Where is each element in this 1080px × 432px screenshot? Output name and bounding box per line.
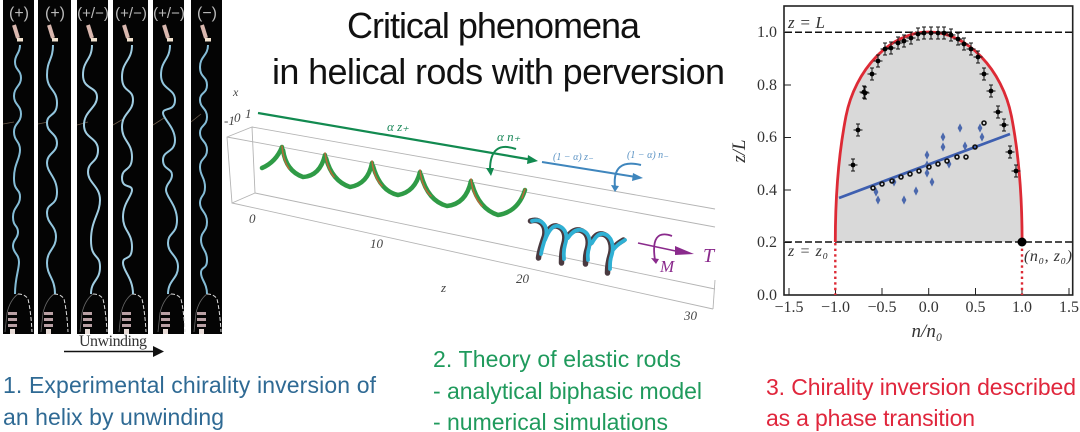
x tick labels: 0.5 — [966, 299, 986, 316]
caption 2: theory: - analytical biphasic model — [433, 378, 702, 404]
x tick labels: 1.0 — [1012, 299, 1032, 316]
axis labels: 10 — [370, 236, 384, 251]
axis labels — [224, 85, 698, 323]
x tick labels: 1.5 — [1059, 299, 1079, 316]
black data with error bars — [848, 27, 1020, 177]
axes frame — [784, 6, 1073, 295]
label: unwinding arrow: Unwinding — [79, 333, 147, 350]
critical point marker — [1018, 238, 1026, 246]
strip 4: (+/−) — [115, 5, 147, 22]
purple arrows: M, T — [638, 234, 716, 276]
green rod helix — [262, 146, 525, 215]
axis labels: 20 — [516, 271, 530, 286]
x tick labels — [774, 299, 1079, 316]
annotation z=L: z = L — [787, 13, 825, 32]
blue fit line — [839, 134, 1010, 198]
purple arrows: M, T: T — [703, 245, 716, 267]
y tick labels — [757, 24, 777, 304]
axis labels: z — [440, 280, 446, 295]
strip 6: (−) — [197, 5, 217, 22]
caption 1: experiment: an helix by unwinding — [3, 404, 224, 430]
y axis title: z/L — [729, 139, 750, 164]
strip 2 — [38, 0, 71, 334]
caption 1: experiment: 1. Experimental chirality inversion of — [3, 372, 377, 398]
ticks — [784, 32, 1069, 295]
y tick labels: 0.8 — [757, 77, 777, 94]
x axis title: n/n₀ — [912, 321, 942, 342]
caption 1: experiment — [3, 372, 377, 430]
strip 1: (+) — [9, 5, 29, 22]
axis labels: 0 — [234, 110, 241, 125]
x tick labels: −0.5 — [867, 299, 897, 316]
caption 3: phase transition: as a phase transition — [766, 405, 975, 431]
cyan rod helix — [530, 220, 625, 273]
y tick labels: 0.2 — [757, 234, 777, 251]
strip 6 — [191, 0, 222, 334]
axis labels: 1 — [245, 106, 252, 121]
strip 5 — [153, 0, 185, 334]
label: unwinding arrow — [64, 333, 164, 357]
strip 3: (+/−) — [77, 5, 109, 22]
x tick labels: −1.0 — [821, 299, 850, 316]
blue arrows: (1-alpha) z-, (1-alpha) n-: (1 − α) z₋ — [553, 152, 594, 163]
caption 2: theory: 2. Theory of elastic rods — [433, 346, 681, 372]
green arrows: alpha z+, alpha n+: α n₊ — [497, 129, 521, 144]
strip 1 — [3, 0, 34, 334]
panel: 3D rod simulation box — [224, 85, 716, 323]
strip 2: (+) — [45, 5, 65, 22]
open circle data — [871, 121, 986, 190]
red dotted continuation — [835, 243, 1022, 295]
axis labels: 0 — [249, 211, 256, 226]
panel: phase diagram chart — [729, 6, 1079, 342]
red phase boundary — [835, 32, 1022, 242]
x tick labels: 0.0 — [919, 299, 939, 316]
blue diamonds — [874, 123, 984, 205]
axis labels: x — [232, 85, 239, 99]
blue arrows: (1-alpha) z-, (1-alpha) n-: (1 − α) n₋ — [627, 150, 669, 161]
box wireframe — [227, 127, 715, 309]
strip 4 — [113, 0, 148, 334]
title — [272, 5, 725, 92]
purple arrows: M, T: M — [659, 257, 675, 276]
annotation z=z0: z = z₀ — [787, 243, 828, 260]
green arrows: alpha z+, alpha n+ — [258, 113, 538, 176]
axis labels: -1 — [224, 113, 235, 128]
y tick labels: 0.4 — [757, 182, 777, 199]
axis labels: 30 — [683, 308, 698, 323]
y tick labels: 0.0 — [757, 287, 777, 304]
panel: experimental photo strips — [3, 0, 222, 334]
x tick labels: −1.5 — [774, 299, 804, 316]
y tick labels: 1.0 — [757, 24, 777, 41]
title: in helical rods with perversion — [272, 51, 725, 92]
dashed lines z=L, z=z0 — [785, 32, 1072, 242]
caption 2: theory — [433, 346, 702, 432]
title: Critical phenomena — [347, 5, 641, 46]
strip 5: (+/−) — [153, 5, 185, 22]
green arrows: alpha z+, alpha n+: α z₊ — [387, 119, 409, 134]
y tick labels: 0.6 — [757, 129, 777, 146]
strip 3 — [77, 0, 109, 334]
shaded region under dome — [835, 32, 1022, 242]
blue arrows: (1-alpha) z-, (1-alpha) n- — [542, 150, 669, 192]
annotation critical point: (n₀, z₀) — [1024, 248, 1072, 265]
caption 3: phase transition — [766, 374, 1076, 431]
caption 3: phase transition: 3. Chirality inversion described — [766, 374, 1076, 400]
